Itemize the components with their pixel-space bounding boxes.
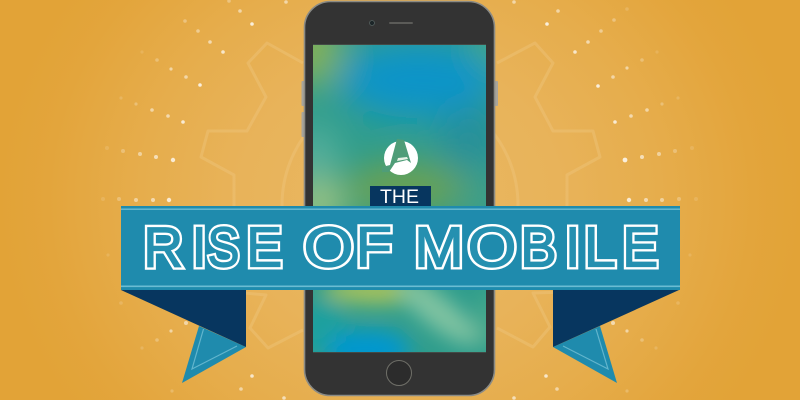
title: RISE OF MOBILE: S xyxy=(207,215,240,279)
title: RISE OF MOBILE: O xyxy=(468,215,516,279)
title: RISE OF MOBILE: E xyxy=(246,215,282,279)
title: RISE OF MOBILE: I xyxy=(565,215,581,279)
title: RISE OF MOBILE: I xyxy=(191,215,207,279)
decorative dots: left rays xyxy=(101,0,288,400)
label: THE tag: THE xyxy=(380,187,419,208)
artwork: background, phone, ribbon and title xyxy=(101,0,698,400)
title: RISE OF MOBILE: M xyxy=(414,215,464,279)
phone screen wallpaper xyxy=(313,45,486,352)
ribbon tail: left xyxy=(121,290,246,383)
ribbon banner xyxy=(121,206,680,290)
label: THE tag xyxy=(370,186,431,208)
title: RISE OF MOBILE: L xyxy=(584,215,616,279)
ribbon tail: right xyxy=(553,290,679,383)
icon: gear outline xyxy=(201,43,600,348)
icon: phone body xyxy=(302,2,498,396)
icon: logo xyxy=(382,139,418,175)
title: RISE OF MOBILE: I xyxy=(191,215,207,279)
title: RISE OF MOBILE: F xyxy=(356,215,392,279)
title: RISE OF MOBILE: O xyxy=(304,215,354,279)
title: RISE OF MOBILE: L xyxy=(584,215,616,279)
title: RISE OF MOBILE: I xyxy=(565,215,581,279)
title: RISE OF MOBILE: R xyxy=(143,215,183,279)
title: RISE OF MOBILE: R xyxy=(143,215,183,279)
title: RISE OF MOBILE: E xyxy=(622,215,658,279)
title: RISE OF MOBILE: O xyxy=(468,215,516,279)
title: RISE OF MOBILE: E xyxy=(246,215,282,279)
title: RISE OF MOBILE: F xyxy=(356,215,392,279)
title: RISE OF MOBILE xyxy=(143,215,658,279)
title: RISE OF MOBILE: B xyxy=(520,215,557,279)
title: RISE OF MOBILE: B xyxy=(520,215,557,279)
title: RISE OF MOBILE: O xyxy=(304,215,354,279)
title: RISE OF MOBILE: E xyxy=(622,215,658,279)
title: RISE OF MOBILE: M xyxy=(414,215,464,279)
decorative dots: right rays xyxy=(512,0,698,400)
title: RISE OF MOBILE: S xyxy=(207,215,240,279)
